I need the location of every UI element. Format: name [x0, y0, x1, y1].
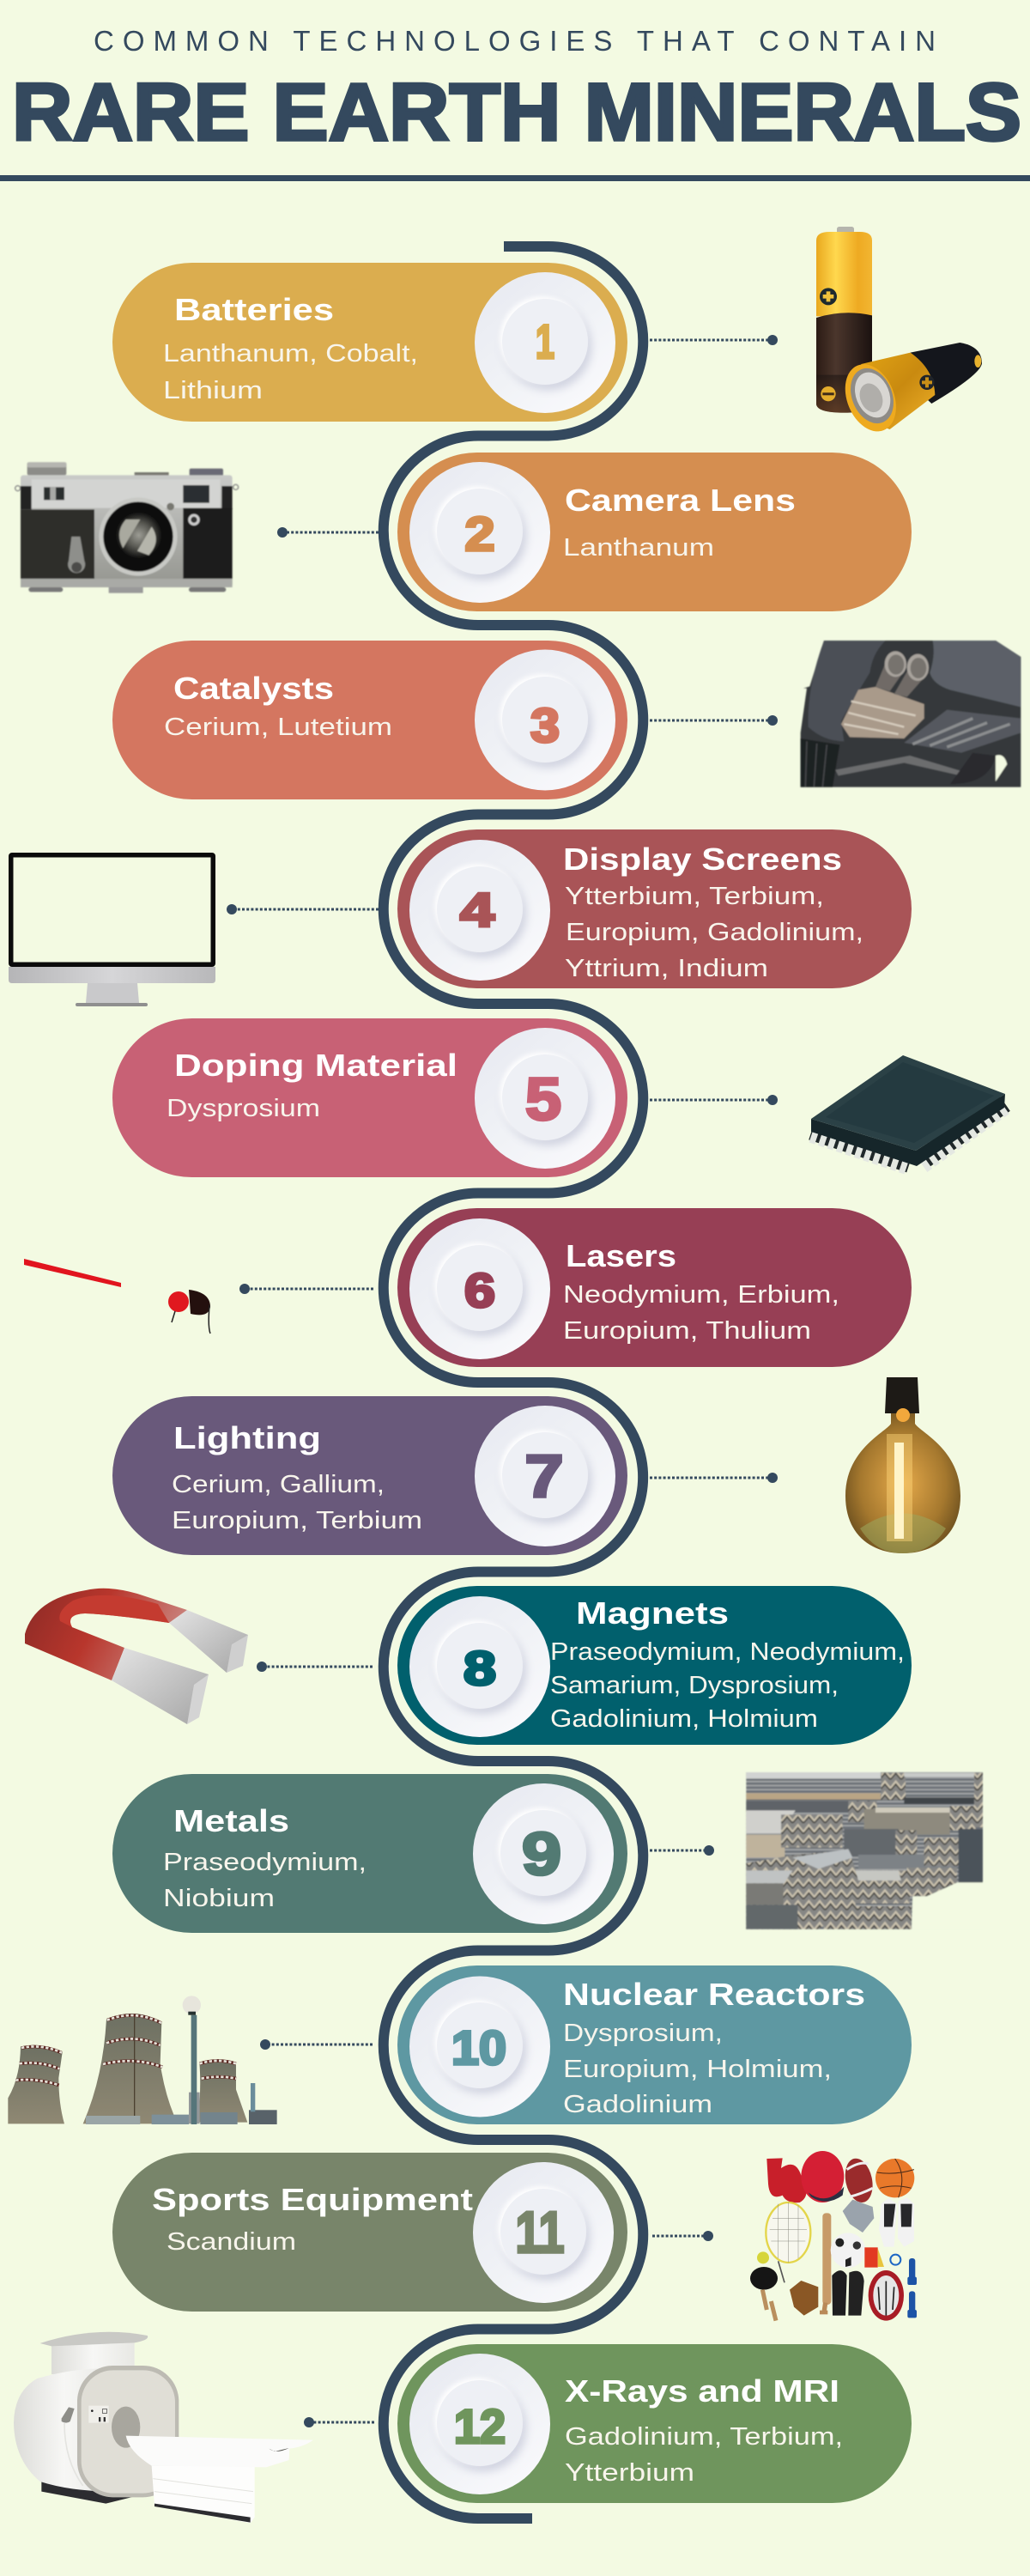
minerals [163, 1849, 367, 1912]
minerals [550, 1638, 905, 1733]
minerals: Dysprosium [167, 1095, 320, 1122]
header rule [0, 175, 1030, 181]
minerals: Europium, Thulium [563, 1317, 811, 1345]
minerals: Niobium [163, 1885, 275, 1912]
minerals: Yttrium, Indium [565, 955, 768, 982]
connector 6 [239, 1284, 373, 1294]
icon: laser pointer [24, 1259, 210, 1334]
icon: microchip [811, 1055, 1005, 1166]
heading: X-Rays and MRI [565, 2373, 839, 2409]
minerals [563, 2020, 832, 2118]
heading: Doping Material [174, 1048, 457, 1083]
heading: Catalysts [173, 671, 334, 706]
number badge: 2 [465, 507, 494, 561]
serpentine connector path [384, 246, 643, 2518]
minerals [172, 1471, 422, 1534]
connector 8 [257, 1662, 373, 1672]
connector 11 [652, 2231, 713, 2241]
minerals: Praseodymium, Neodymium, [550, 1638, 905, 1666]
icon: light bulb [845, 1377, 960, 1553]
minerals: Samarium, Dysprosium, [550, 1672, 839, 1699]
number badge [409, 2354, 550, 2494]
number badge: 10 [451, 2020, 506, 2075]
number badge: 11 [515, 2200, 565, 2265]
icon: sports gear [750, 2151, 917, 2321]
number badge: 5 [525, 1066, 561, 1133]
connector 2 [277, 527, 379, 538]
minerals: Praseodymium, [163, 1849, 367, 1876]
connector 7 [650, 1473, 778, 1483]
number badge: 3 [530, 698, 560, 752]
number badge [409, 1218, 550, 1359]
heading: Sports Equipment [152, 2182, 473, 2217]
icon: mri scanner [14, 2332, 313, 2523]
minerals: Cerium, Gallium, [172, 1471, 385, 1498]
number badge [473, 1783, 614, 1924]
number badge: 9 [522, 1820, 561, 1887]
number badge [475, 272, 615, 413]
minerals: Europium, Terbium [172, 1507, 422, 1534]
connector 4 [227, 904, 379, 914]
minerals: Neodymium, Erbium, [563, 1281, 839, 1309]
main title: RARE EARTH MINERALS [12, 67, 1021, 158]
number badge [473, 2162, 614, 2303]
minerals: Ytterbium, Terbium, [565, 883, 824, 910]
heading: Batteries [174, 292, 334, 327]
panel: 8 magnets [397, 1586, 912, 1745]
heading: Magnets [576, 1595, 729, 1631]
minerals [565, 2423, 843, 2487]
number badge: 12 [454, 2399, 506, 2453]
heading: Camera Lens [565, 483, 796, 518]
minerals: Gadolinium, Terbium, [565, 2423, 843, 2451]
subtitle: COMMON TECHNOLOGIES THAT CONTAIN [94, 25, 936, 57]
panel: 7 lighting [112, 1396, 627, 1555]
icon: cooling towers [8, 1996, 277, 2124]
panel: 9 metals [112, 1774, 627, 1933]
number badge: 7 [525, 1443, 563, 1510]
minerals [163, 340, 418, 404]
number badge [409, 1596, 550, 1737]
minerals: Scandium [167, 2228, 296, 2256]
heading: Display Screens [563, 841, 842, 877]
minerals: Gadolinium [563, 2091, 712, 2118]
minerals: Gadolinium, Holmium [550, 1705, 818, 1733]
connector 3 [650, 715, 778, 726]
connector 12 [304, 2417, 374, 2427]
icon: monitor [9, 853, 215, 1006]
heading: Lasers [566, 1238, 676, 1273]
minerals: Cerium, Lutetium [164, 714, 392, 741]
minerals: Europium, Holmium, [563, 2056, 832, 2083]
number badge [409, 1977, 550, 2117]
icon: car exhaust [801, 641, 1021, 787]
connector 10 [260, 2039, 373, 2050]
number badge: 6 [464, 1263, 495, 1317]
number badge [475, 649, 615, 790]
icon: camera [15, 462, 239, 593]
minerals: Europium, Gadolinium, [566, 919, 863, 946]
number badge [409, 840, 550, 981]
number badge: 8 [464, 1641, 496, 1695]
connector 1 [650, 335, 778, 345]
number badge: 1 [536, 314, 554, 368]
number badge [475, 1028, 615, 1169]
icon: horseshoe magnet [25, 1589, 248, 1724]
heading: Lighting [173, 1420, 321, 1455]
heading: Metals [173, 1803, 289, 1838]
minerals: Dysprosium, [563, 2020, 723, 2047]
icon: batteries [816, 227, 982, 439]
minerals: Lanthanum [563, 534, 714, 562]
connector 9 [650, 1845, 714, 1856]
panel: 2 camera lens [397, 453, 912, 611]
icon: steel stack [746, 1772, 985, 1930]
number badge: 4 [460, 883, 494, 937]
panel: 3 catalysts [112, 641, 627, 799]
minerals [563, 1281, 839, 1345]
number badge [475, 1406, 615, 1546]
panel: 11 sports equipment [112, 2153, 627, 2312]
panel: 12 x-rays and mri [397, 2344, 912, 2503]
panel: 4 display screens [397, 829, 912, 988]
panel: 10 nuclear reactors [397, 1965, 912, 2124]
panel: 1 batteries [112, 263, 627, 422]
panel: 5 doping material [112, 1018, 627, 1177]
minerals: Ytterbium [565, 2459, 694, 2487]
minerals: Lanthanum, Cobalt, [163, 340, 418, 368]
connector 5 [650, 1095, 778, 1105]
heading: Nuclear Reactors [563, 1977, 865, 2012]
title: header [0, 25, 1030, 181]
minerals: Lithium [163, 377, 263, 404]
panel: 6 lasers [397, 1208, 912, 1367]
number badge [409, 462, 550, 603]
minerals [565, 883, 863, 982]
